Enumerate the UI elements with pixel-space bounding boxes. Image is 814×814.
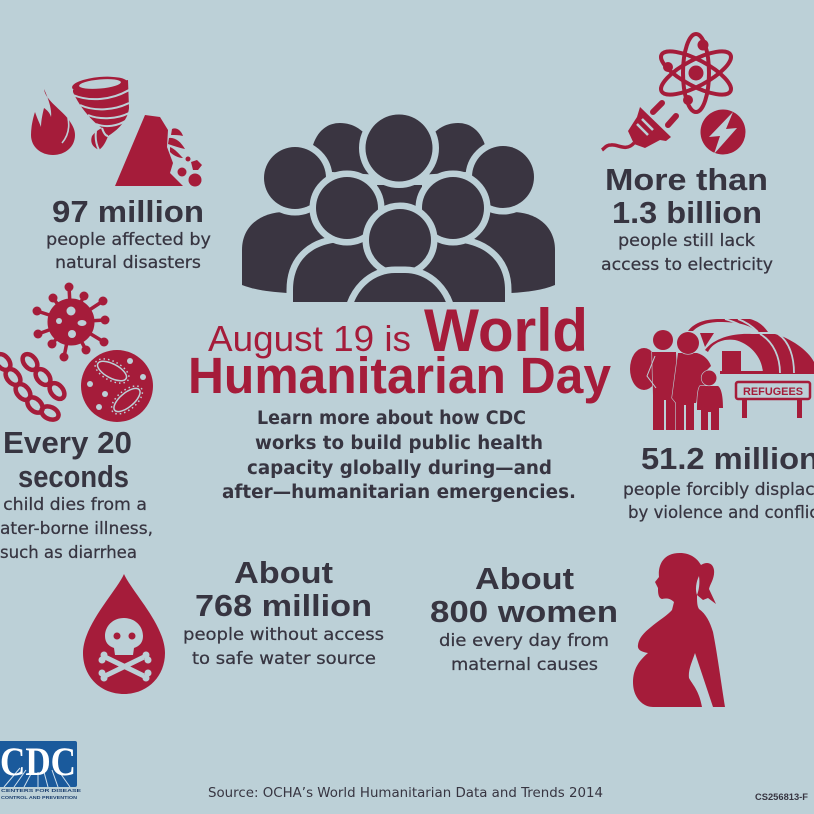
panel: refugees (623, 319, 814, 523)
icon: bacteria chains (0, 351, 67, 422)
icon: lightning circle (700, 110, 746, 154)
document code: CS256813-F (755, 792, 809, 802)
text: access to electricity: access to electricity (601, 255, 773, 275)
icon: blood drop with skull (83, 574, 165, 694)
stat: 800 women: 800 women (430, 594, 618, 629)
stat: 97 million: 97 million (52, 194, 204, 229)
icon: rockslide mountain (115, 115, 202, 186)
panel: natural disasters (31, 75, 211, 273)
line 2: works to build public health (255, 433, 543, 454)
panel: electricity (601, 34, 773, 275)
stat: 51.2 million: 51.2 million (641, 441, 814, 476)
line 3: capacity globally during—and (247, 458, 552, 479)
heading line 1 light: August 19 is (208, 318, 411, 359)
text: people still lack: people still lack (618, 231, 755, 251)
heading line 2: Humanitarian Day (188, 347, 612, 404)
line 4: after—humanitarian emergencies. (222, 482, 576, 503)
stat: about: About (475, 561, 574, 596)
text: natural disasters: natural disasters (55, 253, 201, 273)
stat: 768 million: 768 million (195, 588, 372, 623)
icon: crowd of people (242, 114, 555, 320)
logo: CDC: CENTERS FOR DISEASE (1, 788, 81, 793)
text: die every day: die every day from (439, 631, 609, 651)
text: people affected: people affected by (46, 230, 211, 250)
stat: about: About (234, 555, 333, 590)
heading: August 19 is World Humanitarian Day (188, 297, 612, 404)
text: such as diarrhea: such as diarrhea (0, 543, 137, 563)
stat: 1.3 billion: 1.3 billion (612, 195, 762, 230)
stat: every 20: Every 20 (3, 425, 132, 460)
icon: fire (31, 89, 75, 155)
text block: learn more (222, 408, 576, 503)
icon: virus (32, 282, 110, 362)
icon: atom (655, 34, 737, 112)
icon: family (630, 330, 723, 430)
logo: CDC: CDC (0, 739, 76, 784)
panel: water-borne illness (0, 282, 153, 563)
icon: refugees sign: REFUGEES (743, 386, 803, 398)
icon: pregnant woman (633, 553, 725, 707)
icon: tornado (71, 75, 129, 150)
icon: refugees sign (736, 382, 810, 418)
source line: Source: OCHA’s World Humanitarian Data and Trends 2014 (208, 785, 603, 801)
logo: CDC: CONTROL AND PREVENTION (1, 795, 77, 800)
line 1: Learn more about how CDC (257, 408, 526, 429)
stat: more than: More than (605, 162, 768, 197)
text: people without access: people without access (183, 625, 384, 645)
icon: bacteria circle (81, 350, 153, 422)
icon: plug (602, 103, 676, 150)
panel: maternal deaths (430, 553, 725, 707)
text: to safe water source: to safe water source (192, 649, 376, 669)
panel: safe water (83, 555, 384, 694)
stat: seconds: seconds (18, 459, 129, 494)
text: maternal causes: maternal causes (451, 655, 598, 675)
icon: shelters (688, 319, 814, 374)
heading line 1 bold: World (424, 297, 588, 364)
